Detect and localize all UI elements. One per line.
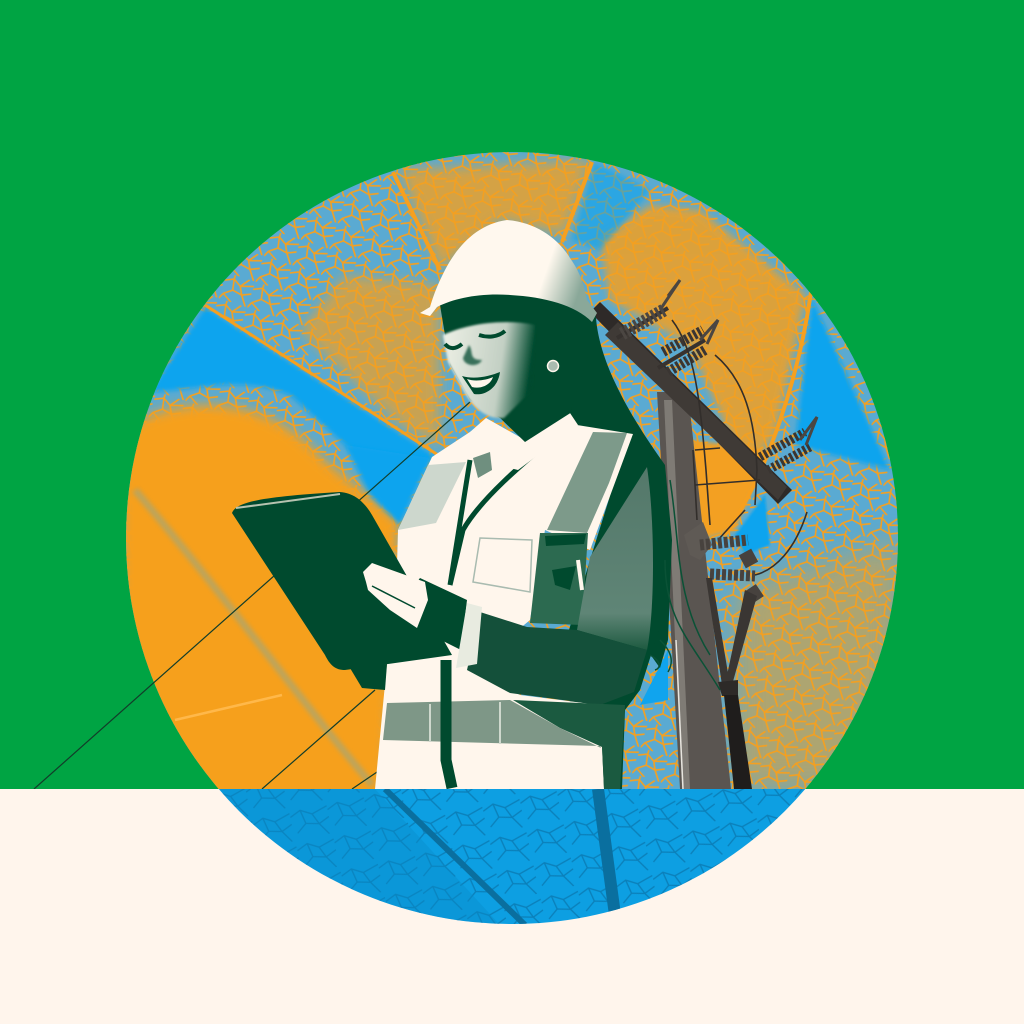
hair strands bbox=[650, 480, 720, 690]
lower insulators bbox=[700, 522, 764, 789]
dark back and sleeve mass bbox=[569, 496, 651, 789]
cream base panel bbox=[0, 789, 1024, 1024]
green background panel bbox=[0, 0, 1024, 789]
lower dark panel bbox=[513, 700, 625, 789]
leaf main ribs bbox=[175, 162, 811, 720]
hard hat bbox=[420, 220, 597, 322]
pouch area bbox=[530, 533, 588, 625]
facial features bbox=[445, 331, 505, 394]
pocket bbox=[473, 538, 532, 592]
cuff bbox=[456, 603, 482, 668]
zipper and lanyard bbox=[448, 458, 533, 586]
leaf circle, lower blue part bbox=[218, 789, 806, 924]
head dark mass bbox=[440, 290, 596, 425]
worker bbox=[232, 220, 720, 789]
leaf orange masses bbox=[120, 160, 900, 800]
hair bbox=[570, 318, 672, 668]
grey chest panel bbox=[547, 432, 627, 533]
vest bbox=[375, 425, 633, 789]
face light bbox=[443, 322, 535, 418]
sleeve bbox=[577, 467, 653, 650]
forearm bbox=[467, 612, 647, 705]
neck bbox=[500, 412, 570, 442]
tablet bbox=[232, 492, 452, 670]
utility pole bbox=[590, 280, 817, 789]
leaf circle, upper part bbox=[34, 150, 910, 800]
reflective band bbox=[383, 700, 601, 748]
collar bbox=[470, 407, 578, 470]
earring bbox=[548, 360, 558, 372]
insulators bbox=[617, 280, 817, 470]
pole wires bbox=[672, 320, 807, 575]
vest left shade bbox=[398, 462, 466, 530]
leaf vein lattice bbox=[120, 150, 910, 800]
hand bbox=[418, 578, 467, 650]
leaf blue masses bbox=[135, 162, 890, 785]
wires bbox=[34, 402, 470, 789]
